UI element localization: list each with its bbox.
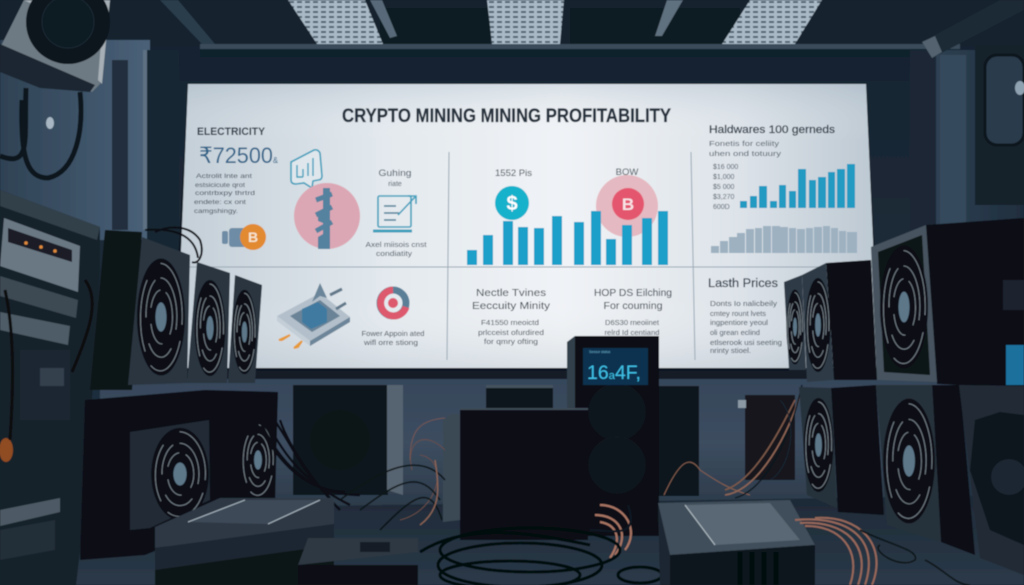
upper big fan box xyxy=(871,218,1024,388)
lower small fan box xyxy=(799,385,884,515)
axis labels: $3,270 xyxy=(713,194,735,201)
copper cable coil centre right xyxy=(590,505,631,558)
icon: report with arrow xyxy=(373,196,416,231)
heading: gushing rate: Guhing xyxy=(378,168,412,179)
panel: gushing rate xyxy=(366,168,427,258)
lasth prices description: Donts Io nalicbeily xyxy=(710,301,778,308)
left rack xyxy=(0,190,100,585)
panel: hardware xyxy=(709,124,857,253)
icon: donut gauge xyxy=(380,290,406,316)
gushing rate caption: Axel miisois cnst xyxy=(366,242,427,249)
icon: speech bubble chart xyxy=(291,150,322,188)
front left lid device xyxy=(155,498,334,585)
infographic screen xyxy=(172,84,880,371)
description: F41550 rneoictd xyxy=(481,320,539,327)
front small device xyxy=(298,538,418,585)
electricity description: endete: cx ont xyxy=(194,199,246,206)
description xyxy=(478,320,544,346)
display screen xyxy=(583,348,648,385)
blue bar chart xyxy=(740,164,855,208)
heading xyxy=(594,288,672,312)
back box: centre left speaker xyxy=(293,385,403,495)
front right lid device xyxy=(658,500,815,585)
panel: electricity xyxy=(194,126,279,250)
description: relrd Id centiand xyxy=(604,330,660,337)
heading: Nectle Tvines xyxy=(476,288,546,299)
icon: bitcoin badge xyxy=(612,188,644,220)
icon: dollar coin: $ xyxy=(506,193,518,215)
fan box 3 xyxy=(228,275,262,383)
ceiling with beams and lights xyxy=(0,0,1024,57)
axis labels xyxy=(713,164,738,211)
lasth prices description: nrinty stioel. xyxy=(710,348,751,355)
lasth prices description: etlserook usi seeting xyxy=(710,340,782,347)
panel dividers xyxy=(180,152,872,360)
electricity description: camgshingy. xyxy=(194,208,238,215)
hardware description: uhen ond totuury xyxy=(709,151,782,158)
axis labels: $16 000 xyxy=(713,164,738,171)
electricity description: estsicicute qrot xyxy=(195,182,245,189)
electricity description: Actrolit lnte ant xyxy=(196,173,252,180)
chart label left: 1552 Pis xyxy=(495,168,532,179)
description xyxy=(604,320,660,337)
electricity value: ₹72500& xyxy=(199,143,279,168)
heading: For couming xyxy=(604,301,662,312)
left wall panels xyxy=(0,40,179,380)
black cable pile centre front xyxy=(420,528,662,585)
icon: dollar coin xyxy=(495,186,529,220)
big black box, centre xyxy=(443,408,588,540)
thin floor cables xyxy=(860,530,970,585)
right fan stacks xyxy=(784,218,1024,575)
description: prlcceist ofurdired xyxy=(478,330,544,337)
display screen: 16a4F, xyxy=(587,363,641,384)
lasth prices description xyxy=(710,301,782,355)
description: for qmry ofting xyxy=(484,339,538,346)
panel: nectle tvines xyxy=(472,288,550,346)
copper cable bundle front right xyxy=(795,518,877,585)
panel: gushing rate: riate xyxy=(388,181,402,188)
right wall panels and pipe xyxy=(910,0,1024,250)
back box: small centre xyxy=(486,385,553,415)
panel: lasth prices xyxy=(708,278,782,355)
description: D6S30 rneoiinet xyxy=(605,320,659,327)
heading: hardware: Haldwares 100 gerneds xyxy=(709,124,836,136)
axis labels: $1,000 xyxy=(713,174,735,181)
lower left fan box xyxy=(80,390,278,560)
floor xyxy=(60,495,1024,585)
display screen: Sensor status xyxy=(589,350,611,354)
heading: electricity: ELECTRICITY xyxy=(197,126,266,138)
wall trim under screen xyxy=(170,371,890,379)
axis labels: $5 000 xyxy=(713,184,735,191)
heading: lasth prices: Lasth Prices xyxy=(708,278,778,290)
lower wall xyxy=(100,378,960,508)
lower big fan box xyxy=(876,385,975,555)
heading xyxy=(472,288,550,312)
far right speaker box xyxy=(959,385,1024,575)
back box: right of tall device xyxy=(655,386,699,496)
fan box 2 xyxy=(187,262,230,383)
electricity description xyxy=(194,173,255,215)
lasth prices description: oli grean eclind xyxy=(710,330,760,337)
panel: hop ds eilching xyxy=(594,288,672,337)
hardware description: Fonetis for celiity xyxy=(709,141,780,148)
title: CRYPTO MINING MINING PROFITABILITY xyxy=(342,106,671,127)
axis labels: 600D xyxy=(713,204,730,211)
gushing rate caption: condiatity xyxy=(376,251,413,258)
back box: far right small xyxy=(738,395,795,480)
wires centre xyxy=(340,418,445,530)
gray area chart xyxy=(711,226,857,253)
lasth prices description: cmtey rount lvets xyxy=(710,311,767,318)
chart label right: BOW xyxy=(616,167,638,178)
upper small fan box xyxy=(784,260,877,382)
icon: red bitcoin circle back xyxy=(596,175,658,237)
electricity description: contrbxpy thrtrd xyxy=(195,190,255,197)
heading: HOP DS Eilching xyxy=(594,288,672,299)
wall-mounted fan unit, top left xyxy=(0,0,110,92)
bars xyxy=(467,211,668,265)
cables over fan boxes xyxy=(145,227,202,263)
hardware description xyxy=(709,141,782,158)
power caption: wifl orre stiong xyxy=(363,340,418,347)
heading: Eeccuity Minity xyxy=(472,301,550,312)
icon: bitcoin plug: B xyxy=(248,229,258,245)
panel: power appointed xyxy=(277,283,425,348)
fan box 1 xyxy=(90,230,190,390)
lasth prices description: ingpentiore yeoul xyxy=(710,320,768,327)
icon: bitcoin badge: B xyxy=(622,195,634,214)
power caption: Fower Appoin ated xyxy=(362,331,425,338)
icon: isometric chip xyxy=(277,283,350,348)
icon: pink circle with tower xyxy=(294,183,360,249)
wires to right stack xyxy=(664,385,802,498)
black cable bundle left xyxy=(248,410,360,510)
tall device with display xyxy=(567,336,659,536)
power caption xyxy=(362,331,425,347)
panel: centre bar chart xyxy=(467,167,668,265)
gushing rate caption xyxy=(366,242,427,258)
left fan boxes xyxy=(90,227,262,390)
